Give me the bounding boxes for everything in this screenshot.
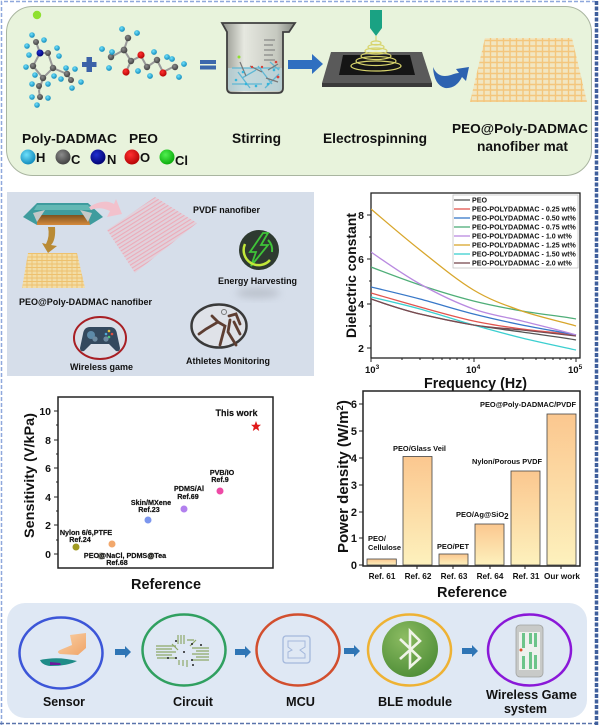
bar labels: PEO/Glass Veil [393,444,446,453]
axis ticks and labels: 4 [358,299,364,311]
labels: materials and steps: nanofiber mat [477,139,569,154]
point labels: PDMS/Al [174,484,204,493]
step: MCU: MCU [286,695,315,709]
axis ticks and labels: 1 [351,533,357,545]
icon: device layers [23,203,103,225]
labels: materials and steps [22,121,589,154]
step: sensor [20,618,102,709]
y axis title: ) [335,400,352,405]
labels: materials and steps: Poly-DADMAC [22,131,118,146]
data points [72,421,261,560]
category labels: Ref. 61 [369,572,396,581]
molecule: PEO [99,26,187,80]
point labels: Ref.68 [106,558,128,567]
step: wireless game system: system [504,702,547,716]
legend: PEO-POLYDADMAC - 2.0 wt% [472,260,573,268]
chart: dielectric constant vs frequency [343,193,583,392]
category labels: Ref. 62 [405,572,432,581]
bar labels [368,400,576,552]
arrow: sensor to circuit [115,646,131,658]
arrow: MCU to BLE [344,645,360,657]
soft shadow: energy harvesting [236,288,280,298]
step: circuit: Circuit [173,695,214,709]
point labels: Ref.24 [69,535,91,544]
axis ticks and labels: 10 [39,406,51,418]
axis ticks and labels: 3 [376,364,380,371]
icon: beaker [222,23,295,93]
axis ticks and labels: 10 [568,365,579,376]
step: MCU [256,614,340,709]
point labels [60,408,258,567]
icon: electrospinning setup [322,10,432,87]
bar labels: Nylon/Porous PVDF [472,457,542,466]
legend: atoms: Cl [175,153,188,168]
category labels [369,572,580,581]
legend: atoms: N [107,152,116,167]
point labels: This work [215,408,258,418]
chart: sensitivity comparison [21,397,273,593]
arrow: to PVDF nanofiber [89,199,122,217]
point labels: Ref.9 [211,475,229,484]
axis ticks and labels: 0 [351,560,357,572]
legend: PEO-POLYDADMAC - 1.0 wt% [472,232,573,240]
axis ticks and labels: 5 [351,426,357,438]
axis ticks and labels: 6 [351,399,357,411]
y axis title: 2 [335,405,346,410]
bar labels: PEO/Ag@SiO [456,510,504,519]
legend: atoms: C [71,152,81,167]
axis ticks and labels: 8 [358,210,364,222]
label: wireless game: Wireless game [70,362,133,373]
legend: atoms: H [36,150,45,165]
panel: wireless game signal chain [7,603,587,718]
y axis title: Sensitivity (V/kPa) [21,413,37,538]
legend: PEO [472,196,487,204]
label: PEO nanofiber: PEO@Poly-DADMAC nanofiber [19,297,152,308]
point labels: Skin/MXene [131,498,171,507]
axis ticks and labels: 4 [477,364,481,371]
panel: fabrication process [6,6,592,176]
point labels: Ref.23 [138,505,160,514]
bar labels: Cellulose [368,543,401,552]
label: PVDF nanofiber: PVDF nanofiber [193,205,260,215]
icon: wireless game [74,317,126,359]
legend: PEO-POLYDADMAC - 1.25 wt% [472,242,576,250]
x axis title: Reference [131,577,201,593]
axis ticks and labels: 4 [45,492,51,504]
point labels: PEO@NaCl, PDMS@Tea [84,551,167,560]
category labels: Ref. 31 [513,572,540,581]
bars [367,414,576,565]
axis ticks and labels: 6 [358,254,364,266]
axis ticks and labels: 2 [45,520,51,532]
axis ticks and labels: 6 [45,463,51,475]
category labels: Our work [544,572,580,581]
legend: atoms [20,150,188,168]
plus sign [82,57,96,72]
step: wireless game system [486,614,577,716]
legend: atoms: O [140,150,150,165]
x axis title: Reference [437,585,507,601]
step: BLE module [368,614,452,709]
arrow: to PEO nanofiber [42,227,57,253]
chart: power density comparison [335,391,580,601]
axis ticks and labels: 0 [45,549,51,561]
arrow: circuit to MCU [235,646,251,658]
arrow: curved to nanofiber mat [433,67,469,88]
point labels: Nylon 6/6,PTFE [60,528,112,537]
axis ticks and labels: 4 [351,453,358,465]
y axis title: Dielectric constant [343,213,359,338]
step: circuit [142,614,226,709]
nanofiber mat [470,38,587,102]
data curves [371,209,576,350]
axis ticks and labels [351,399,561,572]
bar labels: PEO/ [368,534,387,543]
bar labels: PEO/PET [437,542,469,551]
legend: PEO-POLYDADMAC - 0.25 wt% [472,206,576,214]
labels: materials and steps: Stirring [232,131,281,146]
axis ticks and labels: 2 [358,343,364,355]
category labels: Ref. 63 [441,572,468,581]
arrow: BLE to game system [462,645,478,657]
labels: materials and steps: Electrospinning [323,131,427,146]
axis ticks and labels: 2 [351,507,357,519]
axis ticks and labels [358,210,583,376]
axis ticks and labels [39,406,58,561]
PEO nanofiber mat [22,253,85,288]
step: wireless game system: Wireless Game [486,688,577,702]
step: sensor: Sensor [43,695,85,709]
legend: PEO-POLYDADMAC - 1.50 wt% [472,250,576,258]
legend: PEO-POLYDADMAC - 0.75 wt% [472,224,576,232]
point labels: Ref.69 [177,492,199,501]
legend [453,195,578,268]
legend: PEO-POLYDADMAC - 0.50 wt% [472,214,576,222]
arrow: stirring to electrospinning [288,54,323,74]
molecule: Poly-DADMAC [23,11,84,108]
equals sign [200,60,216,70]
step: BLE module: BLE module [378,695,452,709]
icon: athletes monitoring [192,304,246,348]
axis ticks and labels: 10 [365,365,376,376]
bar labels: PEO@Poly-DADMAC/PVDF [480,400,576,409]
labels: materials and steps: PEO@Poly-DADMAC [452,121,589,136]
y axis title: Power density (W/m [335,410,352,553]
axis ticks and labels: 8 [45,435,51,447]
axis ticks and labels: 3 [351,480,357,492]
label: energy harvesting: Energy Harvesting [218,276,297,287]
icon: energy harvesting [239,230,279,270]
axis ticks and labels: 10 [466,365,477,376]
panel: applications [7,192,314,376]
category labels: Ref. 64 [477,572,504,581]
labels: materials and steps: PEO [129,131,158,146]
PVDF nanofiber mat [107,197,197,273]
label: athletes monitoring: Athletes Monitoring [186,356,270,367]
x axis title: Frequency (Hz) [424,376,527,392]
point labels: PVB/IO [210,468,235,477]
axis ticks and labels: 5 [579,364,583,371]
bar labels: 2 [504,512,509,521]
